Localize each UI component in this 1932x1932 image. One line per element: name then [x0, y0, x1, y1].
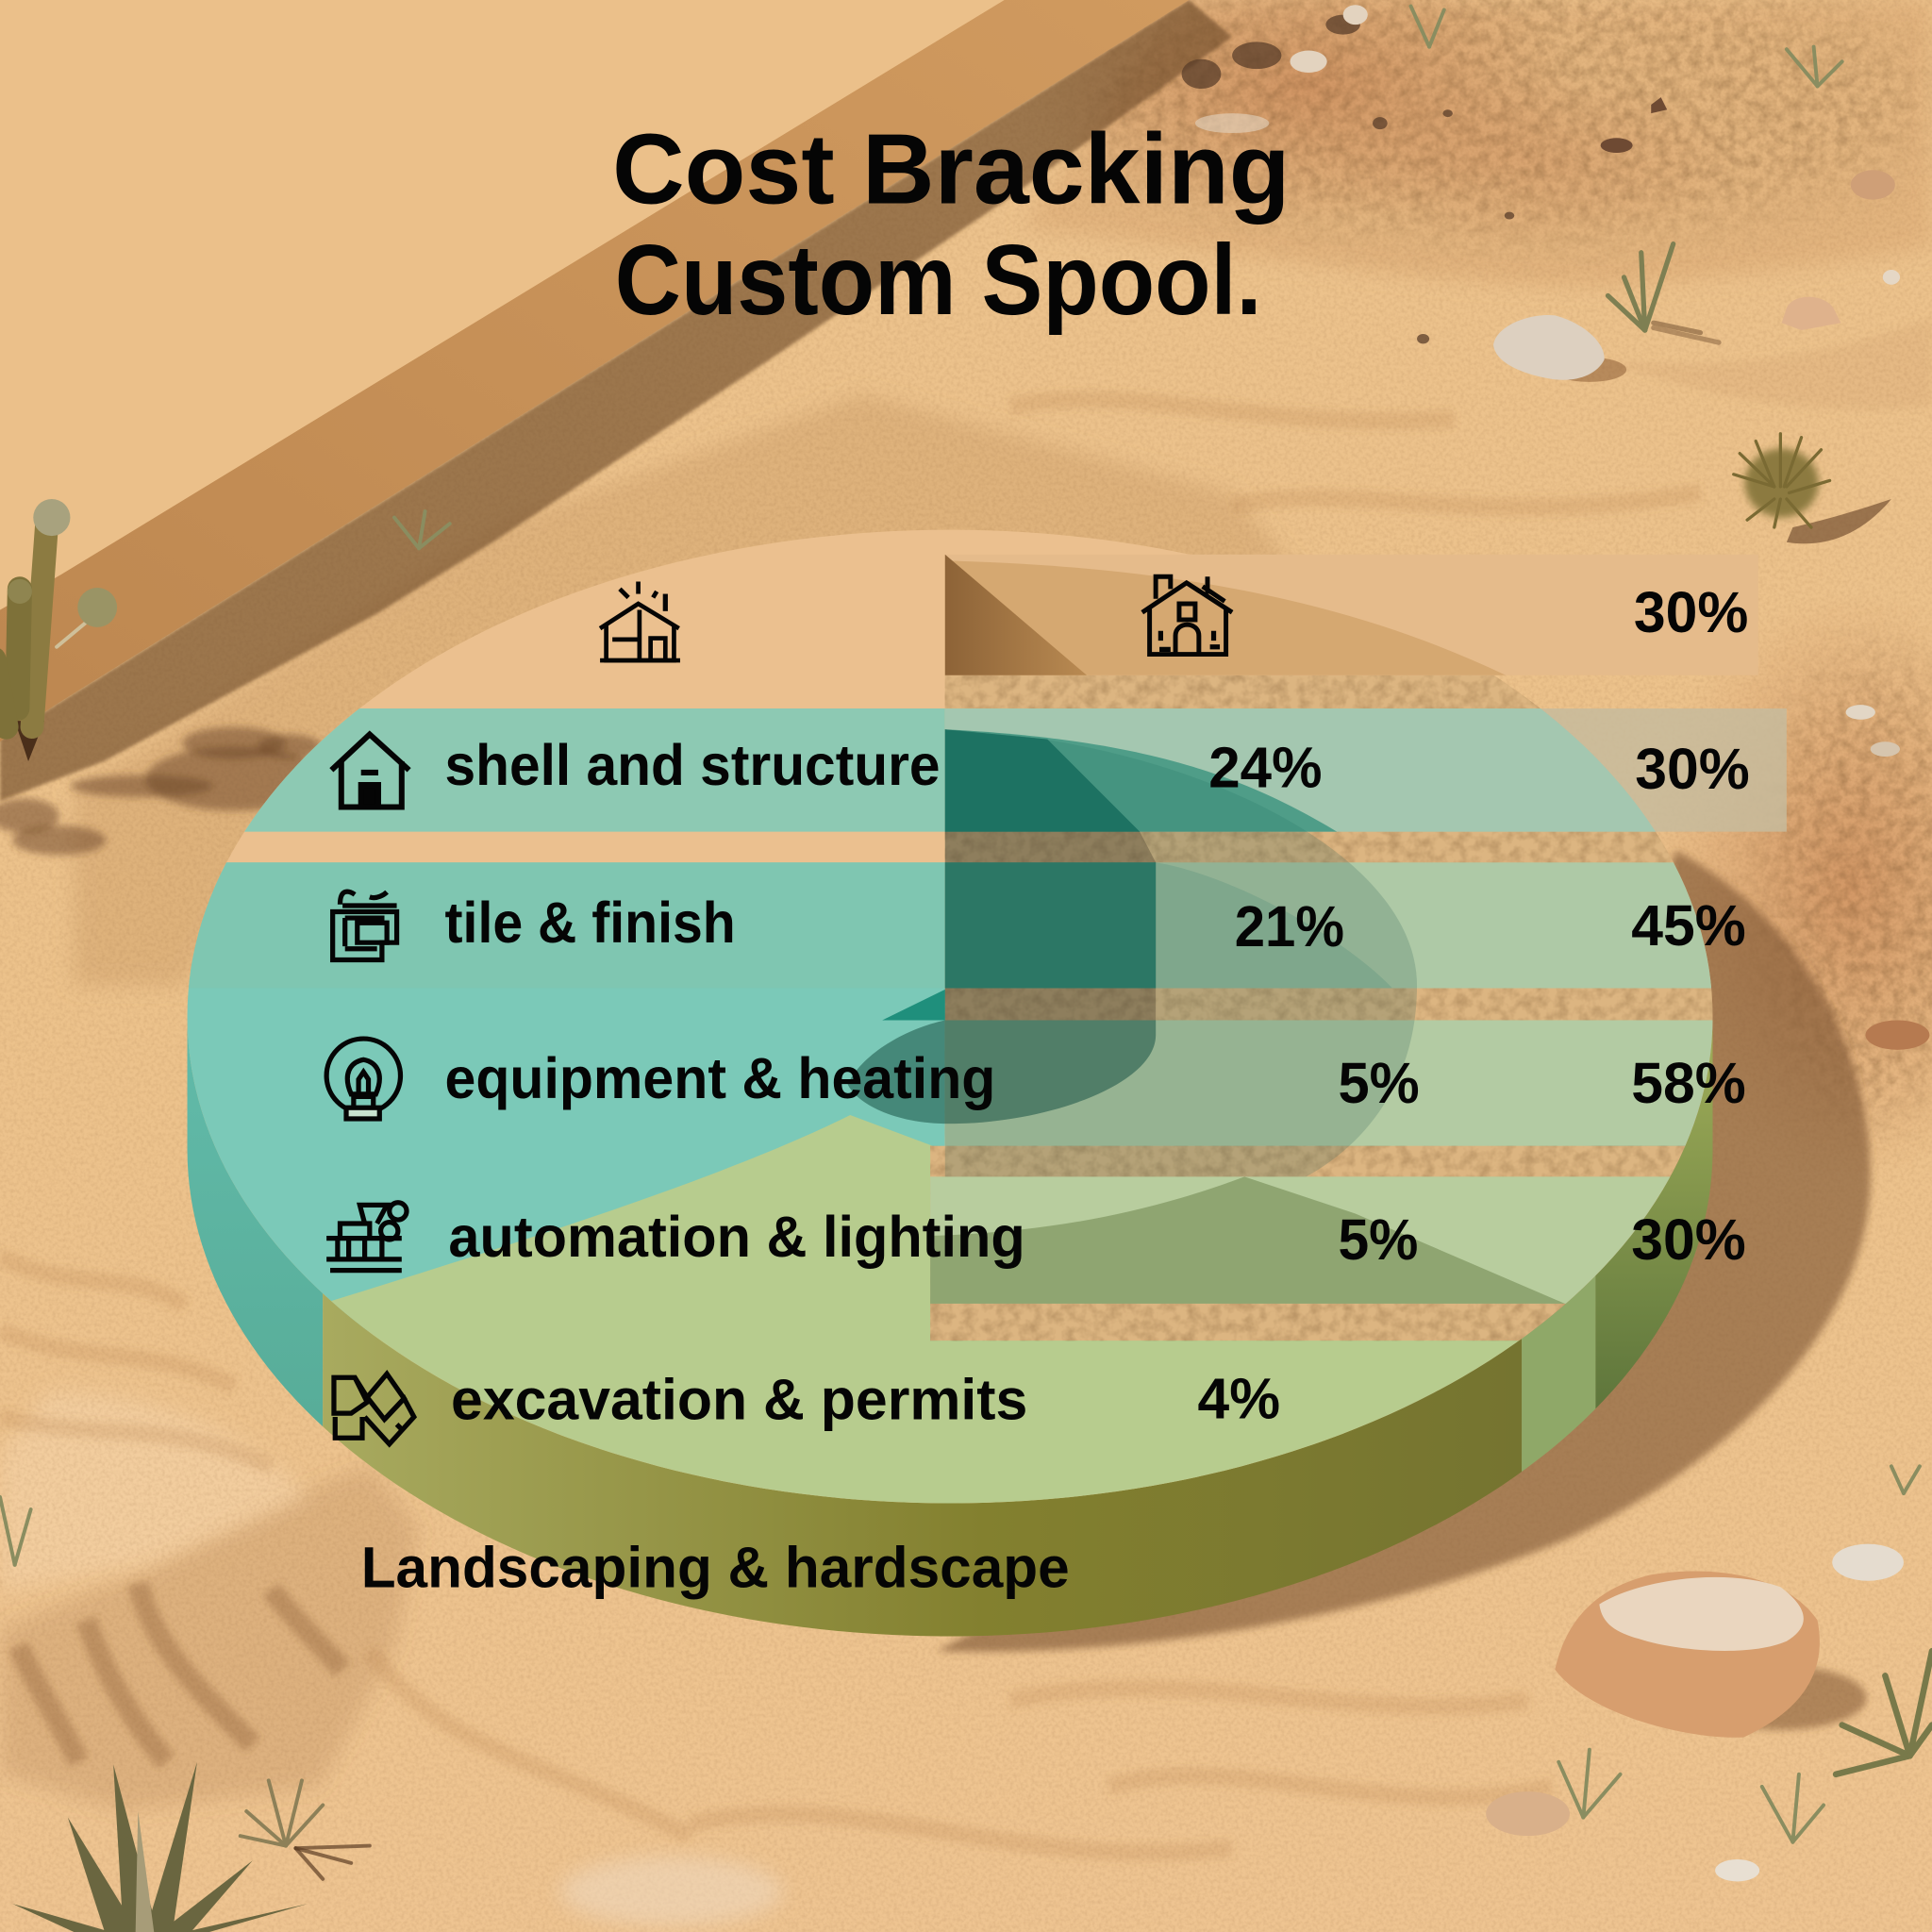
percentage values: 5% [1338, 1051, 1420, 1116]
percentage values: 5% [1338, 1208, 1418, 1273]
percentage values: 58% [1631, 1051, 1746, 1116]
pie chart top surface [185, 524, 1734, 1516]
wall with shadow [0, 0, 1232, 855]
icon: house with sparks [600, 581, 680, 660]
wedge: dark teal centre [882, 990, 945, 1020]
percentage values: 30% [1634, 580, 1748, 645]
icon: house with chimney [1142, 576, 1232, 655]
percentage values: 30% [1635, 737, 1750, 802]
title: Custom Spool. [615, 225, 1261, 336]
slice: peach [226, 530, 1189, 862]
icon: tiles and permit [334, 1374, 414, 1444]
strip row 0: peach band [945, 555, 1758, 675]
category labels [361, 733, 1070, 1600]
title: Cost Bracking [612, 114, 1291, 225]
percentage values: 45% [1631, 893, 1746, 958]
pie ground shadow [937, 850, 1871, 1652]
inner shadow arcs over the cut-out [848, 729, 1565, 1304]
slice: teal [185, 862, 945, 1331]
shrub [1607, 244, 1719, 342]
label: shell and structure: shell and structure [445, 733, 941, 798]
icon: light bulb [326, 1039, 400, 1119]
band: shell left [185, 708, 945, 832]
side: teal segment [187, 1023, 323, 1426]
pie chart 3D body [185, 1010, 1715, 1651]
label: landscaping and hardscape: Landscaping & hardscape [361, 1535, 1070, 1600]
label: equipment and heating: equipment & heating [445, 1046, 995, 1111]
side: light face [1522, 1269, 1595, 1478]
title [612, 114, 1291, 336]
percentage values: 4% [1198, 1366, 1280, 1431]
percentage values: 24% [1208, 736, 1322, 801]
cactus [0, 499, 117, 761]
band: tile left [185, 862, 945, 989]
icon: stacked blocks [326, 1203, 407, 1271]
icon: tile panel [333, 891, 397, 959]
slice: green [332, 1115, 1522, 1504]
agave [12, 1762, 308, 1932]
label: automation and lighting: automation & lighting [448, 1205, 1025, 1270]
side: olive segment [323, 1281, 1522, 1651]
label: tile and finish: tile & finish [445, 891, 736, 956]
percentage values: 30% [1631, 1208, 1746, 1273]
tree shadow [0, 727, 323, 855]
tuft with shadow [1734, 434, 1891, 543]
side: right segment [1596, 1029, 1713, 1408]
agave right [1836, 1651, 1932, 1774]
decorative rocks [1182, 5, 1929, 1881]
strips rows 1 to 4, right half [930, 708, 1787, 1304]
cut-out: sand showing through [930, 675, 1734, 1341]
icon: home [331, 734, 409, 808]
percentage values [1198, 580, 1750, 1431]
label: excavation and permits: excavation & permits [451, 1368, 1027, 1433]
percentage values: 21% [1235, 894, 1344, 959]
